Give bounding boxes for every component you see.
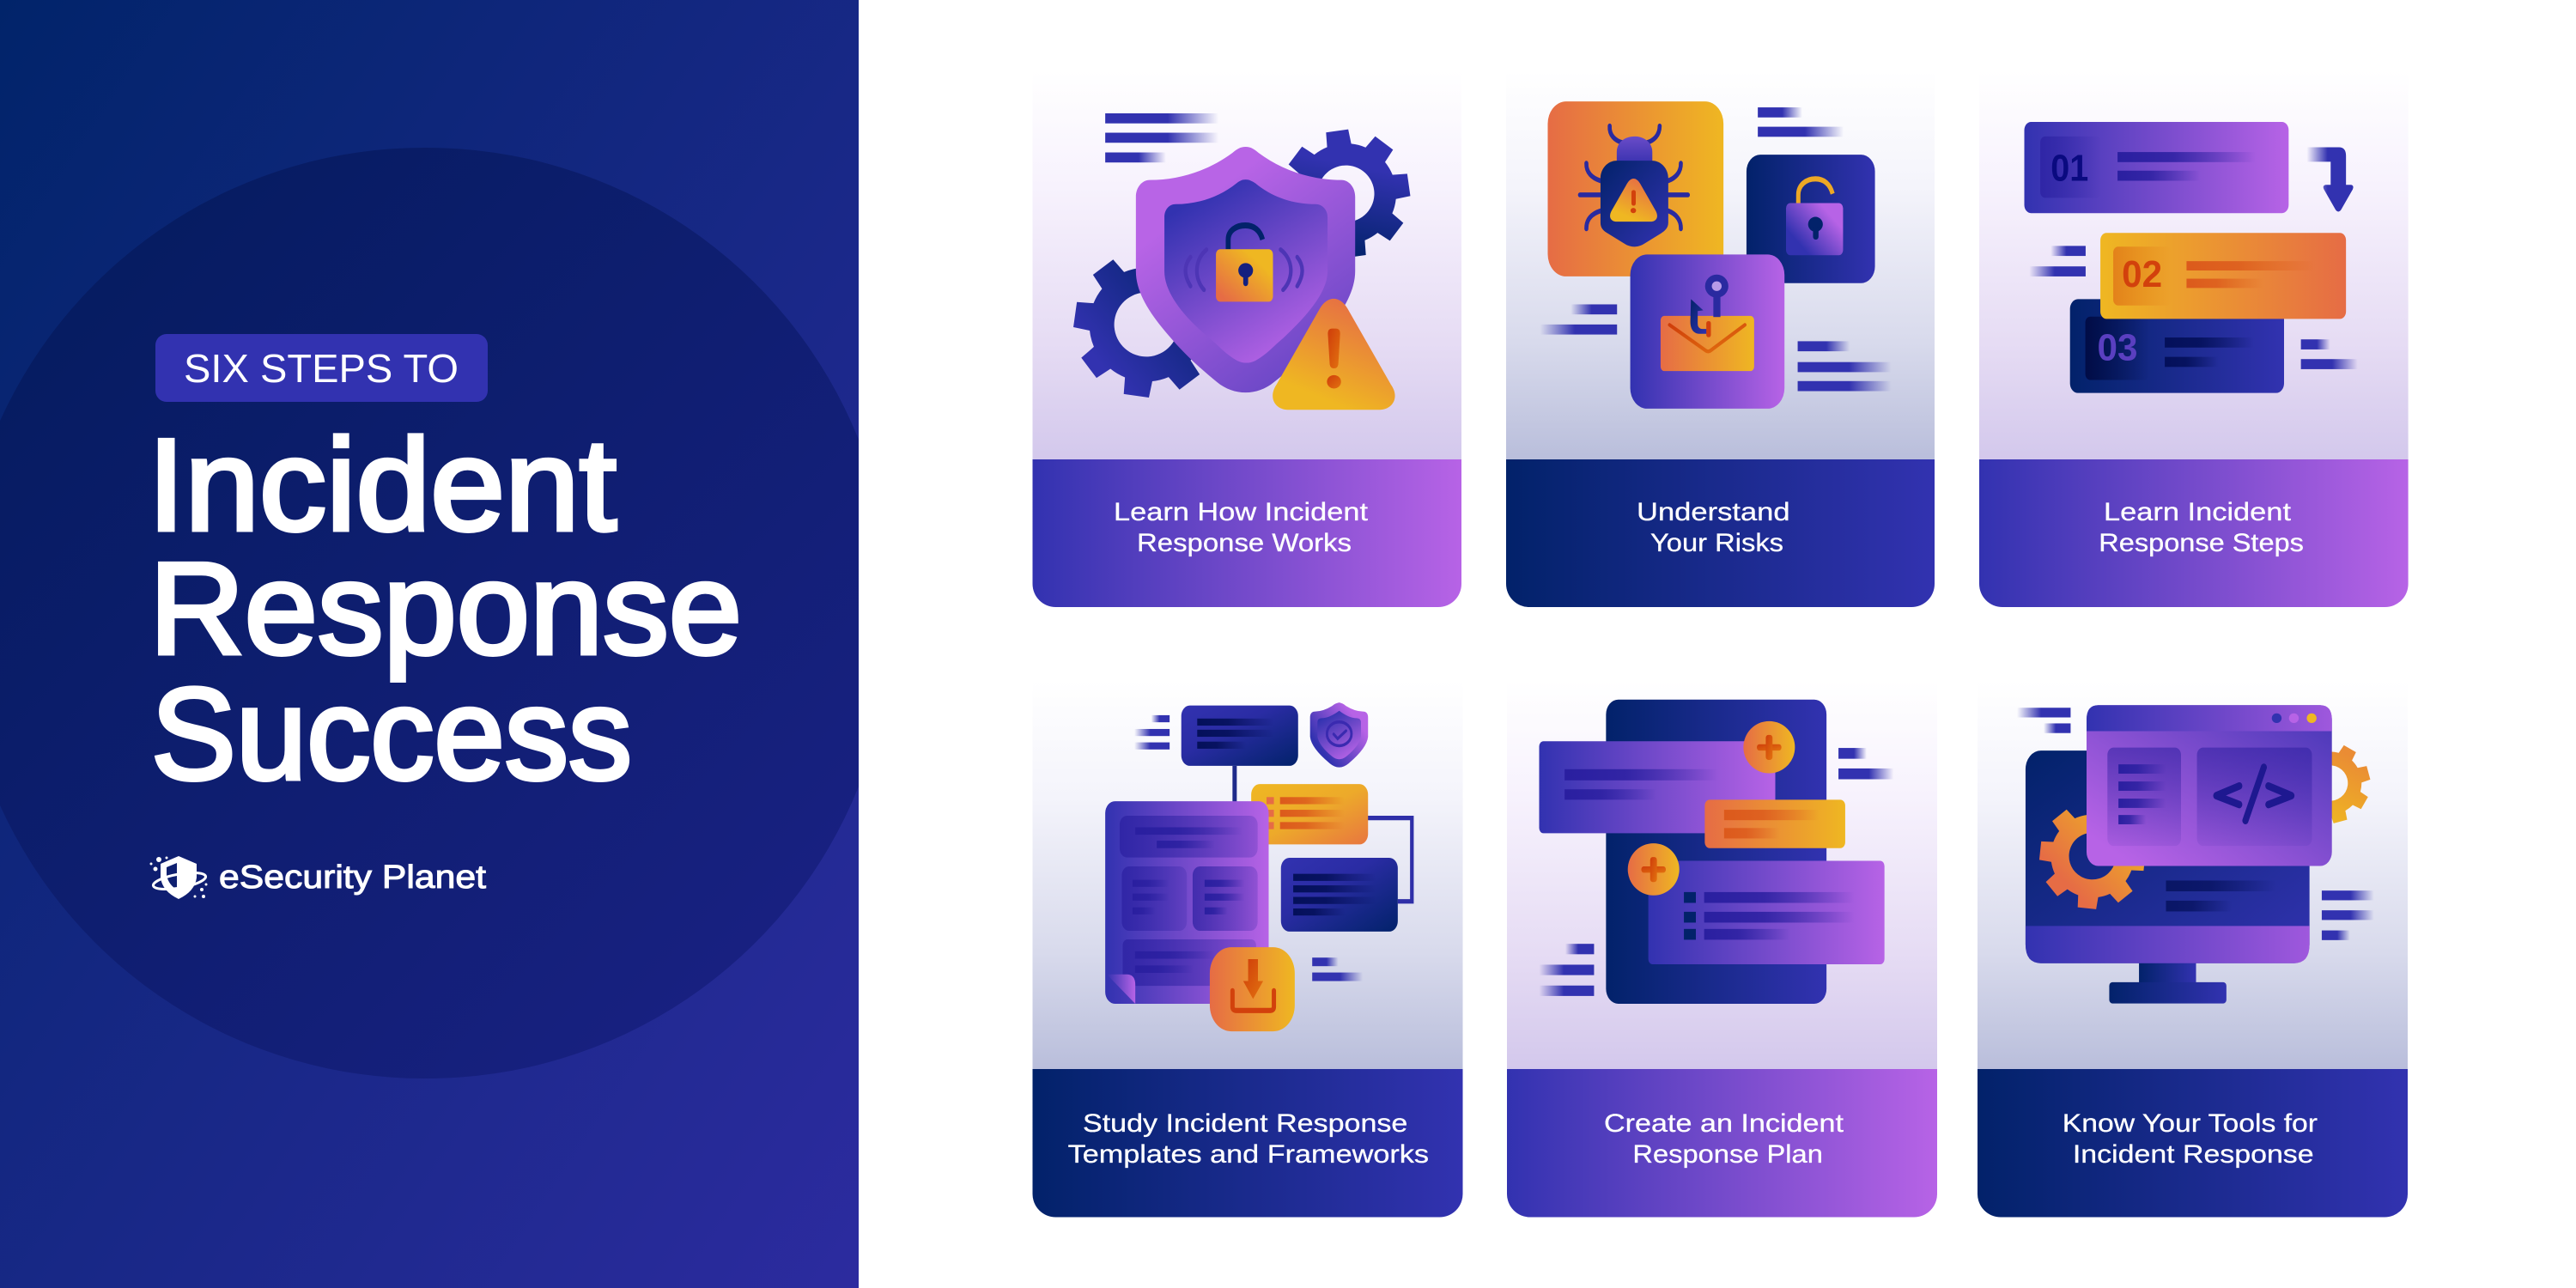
icon: numbered step bars with arrow (2024, 122, 2358, 393)
card 3 caption band: Response Steps (2099, 529, 2304, 557)
card 1 caption band: Response Works (1137, 529, 1352, 557)
card 1 caption band (1032, 459, 1461, 607)
title (148, 412, 742, 807)
card 5 caption band (1507, 1069, 1937, 1218)
left panel background (0, 0, 859, 1288)
card 4 caption band (1032, 1069, 1463, 1218)
panel: card 6 know your tools for incident response (1978, 681, 2408, 1218)
icon: monitor base (2017, 708, 2374, 1004)
icon: gears (1065, 122, 1418, 406)
large background disc (0, 148, 859, 1078)
panel: card 4 study incident response templates and frameworks (1032, 681, 1463, 1218)
icon: numbered step bars with arrow: 02 (2122, 253, 2162, 295)
card 5 caption band: Create an Incident (1604, 1109, 1844, 1138)
logo: eSecurity Planet (149, 856, 486, 899)
card 2 caption band: Understand (1637, 498, 1790, 526)
card 4 caption band: Study Incident Response (1083, 1109, 1407, 1138)
card 6 caption band: Know Your Tools for (2063, 1109, 2318, 1138)
card 5 background (1507, 681, 1937, 1069)
card 6 caption band (1978, 1069, 2408, 1218)
icon: numbered step bars with arrow: 01 (2050, 147, 2088, 189)
panel: card 2 understand your risks (1506, 70, 1935, 607)
card 1 caption band: Learn How Incident (1114, 498, 1369, 526)
card 2 caption band: Your Risks (1650, 529, 1783, 557)
card 2 background (1506, 70, 1935, 459)
panel: card 3 learn incident response steps (1979, 70, 2409, 607)
card 2 caption band (1506, 459, 1935, 607)
title: Response (149, 536, 742, 682)
logo: eSecurity Planet: eSecurity Planet (219, 860, 486, 896)
card 6 caption band: Incident Response (2073, 1140, 2314, 1169)
card 3 background (1979, 70, 2409, 459)
card 1 background (1032, 70, 1461, 459)
icon: plan document with add buttons (1539, 700, 1893, 1004)
title: Success (151, 661, 632, 807)
icon: shield with lock and warning (1105, 113, 1395, 410)
card 6 background (1978, 681, 2408, 1069)
card 4 caption band: Templates and Frameworks (1068, 1140, 1429, 1169)
icon: bug, lock and phishing tiles (1540, 101, 1891, 409)
badge: six steps to (155, 334, 488, 402)
panel: card 1 learn how incident response works (1032, 70, 1461, 607)
icon: numbered step bars with arrow: 03 (2097, 327, 2137, 369)
icon: template document flow (1105, 702, 1412, 1031)
card 4 background (1032, 681, 1463, 1069)
card 3 caption band: Learn Incident (2104, 498, 2292, 526)
card 3 caption band (1979, 459, 2409, 607)
icon: orange gears (2035, 734, 2379, 914)
icon: code window (2087, 705, 2332, 866)
badge: six steps to: SIX STEPS TO (184, 346, 459, 391)
panel: card 5 create an incident response plan (1507, 681, 1937, 1218)
card 5 caption band: Response Plan (1632, 1140, 1823, 1169)
title: Incident (148, 412, 617, 558)
